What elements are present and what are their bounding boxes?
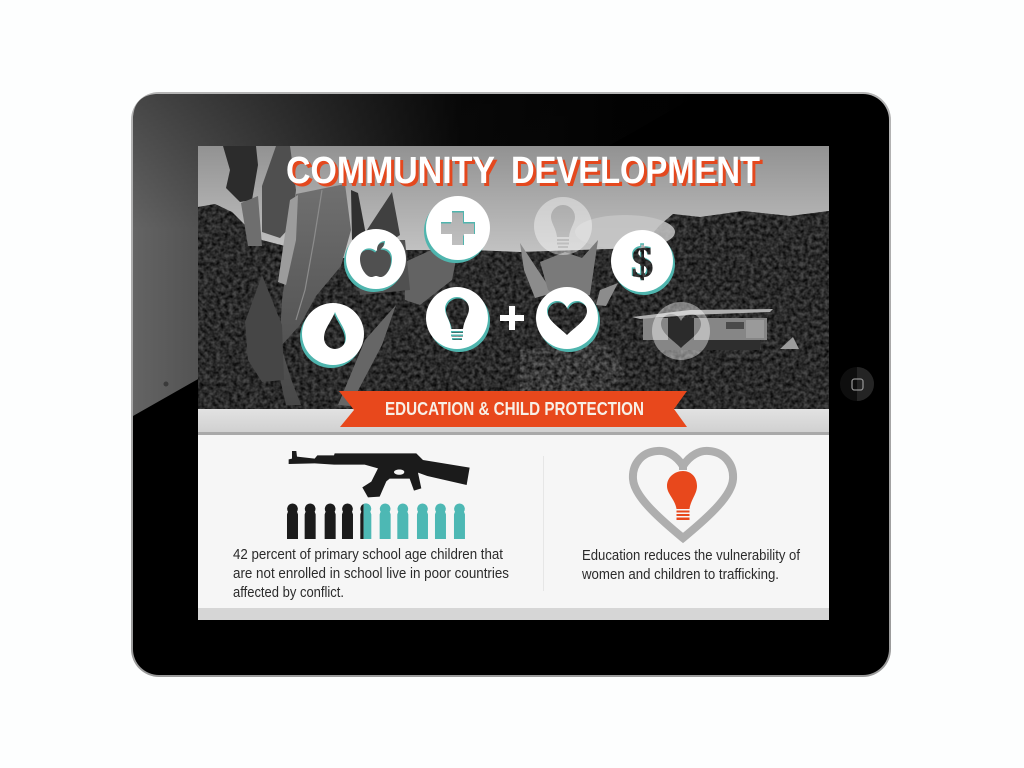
icon: heart — [536, 287, 600, 352]
camera — [164, 382, 168, 386]
title: COMMUNITY — [286, 150, 495, 192]
icon: faded light bulb — [534, 197, 592, 255]
plus sign — [500, 306, 524, 330]
text block: trafficking statement: Education reduces the vulnerability of — [582, 548, 801, 564]
screen glare — [133, 94, 700, 416]
icon: faded heart — [652, 302, 710, 360]
title: DEVELOPMENT — [514, 153, 763, 195]
text block: conflict statistic: are not enrolled in school live in poor countries — [233, 566, 509, 582]
mist over hill — [585, 215, 675, 248]
tablet body — [131, 92, 891, 677]
home button — [840, 367, 874, 401]
text block: conflict statistic: 42 percent of primary school age children that — [233, 547, 503, 563]
text block: conflict statistic — [233, 547, 509, 601]
shrub in foreground — [520, 345, 625, 395]
pictogram: teal children — [364, 503, 465, 539]
banana leaves left — [223, 146, 458, 406]
ribbon banner: EDUCATION & CHILD PROTECTION — [385, 399, 644, 419]
ribbon banner — [339, 391, 687, 427]
icon: light bulb — [426, 287, 490, 352]
icon: medical cross — [424, 196, 490, 263]
title: DEVELOPMENT — [511, 150, 760, 192]
title — [286, 150, 763, 195]
vegetation and hills — [198, 204, 829, 410]
text block: conflict statistic: affected by conflict. — [233, 585, 344, 601]
text block: trafficking statement — [581, 548, 801, 583]
text block: trafficking statement: women and children to trafficking. — [581, 567, 779, 583]
photo: rainforest landscape with house — [198, 146, 829, 410]
icon: water drop — [300, 303, 364, 368]
title: COMMUNITY — [289, 153, 498, 195]
icon: apple — [344, 229, 406, 292]
icon: heart outline with orange bulb — [633, 451, 733, 538]
banana plant centre right — [520, 240, 618, 306]
content panel bands — [198, 409, 829, 620]
column divider — [543, 456, 544, 591]
icon: assault rifle — [289, 451, 470, 497]
pictogram: black children — [287, 503, 364, 539]
house — [632, 309, 799, 350]
icon: dollar sign — [611, 230, 675, 295]
